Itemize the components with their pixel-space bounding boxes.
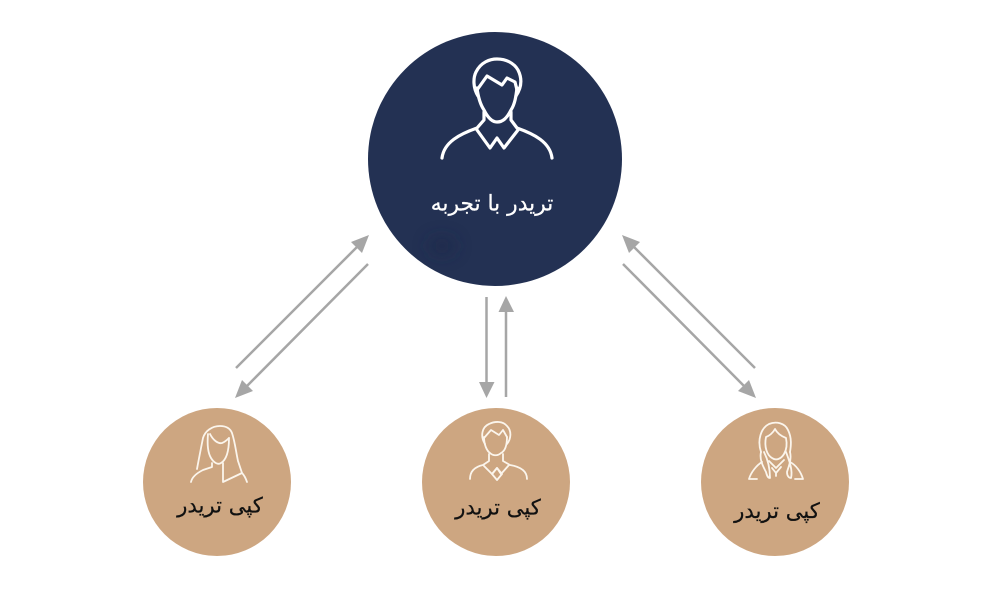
label: experienced trader: تریدر با تجربه xyxy=(431,192,553,216)
icon: woman with long hair xyxy=(191,426,247,482)
right node: copy trader xyxy=(701,408,849,556)
label: copy trader: کپی تریدر xyxy=(733,498,821,523)
icon: man with collar xyxy=(442,59,552,158)
icon: man with tie xyxy=(470,422,527,480)
label: copy trader: کپی تریدر xyxy=(454,494,542,520)
label: copy trader: کپی تریدر xyxy=(176,492,264,518)
left node: copy trader xyxy=(143,408,291,556)
arrows: left pair xyxy=(235,235,369,398)
arrows: right pair xyxy=(622,235,756,398)
centre node: copy trader xyxy=(422,408,570,556)
icon: woman with hand on neck xyxy=(749,423,803,479)
main node: experienced trader xyxy=(368,32,622,286)
arrows: centre pair xyxy=(479,296,514,398)
